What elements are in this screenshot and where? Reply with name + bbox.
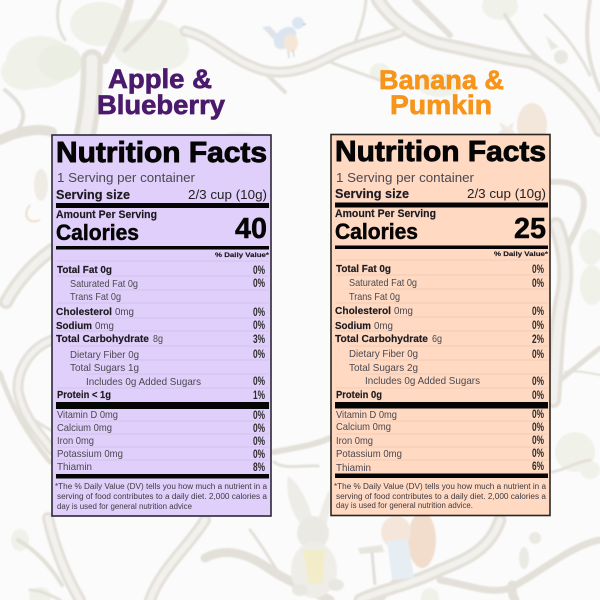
panel: Banana & Pumkin nutrition facts: % Daily Value* [494,251,548,258]
calories: 25 [514,213,546,245]
nutrient rows: 6g [432,333,442,345]
nutrient rows: Saturated Fat 0g [70,278,138,290]
vitamins and minerals: Thiamin [336,462,371,474]
vitamins and minerals: 0% [253,449,265,461]
nutrient rows: Trans Fat 0g [70,291,121,303]
panel: Apple & Blueberry nutrition facts: % Daily Value* [215,252,269,259]
vitamins and minerals: 0% [532,422,544,434]
servings per container: 1 Serving per container [336,171,474,185]
left side branches [6,250,52,302]
title: Banana & Pumkin: Pumkin [390,90,492,120]
nutrient rows: Dietary Fiber 0g [349,348,418,360]
center side branches [274,438,330,452]
nutrient rows: 8g [153,333,163,345]
vitamins and minerals: Thiamin [57,461,92,473]
vitamins and minerals: Potassium 0mg [57,448,123,460]
right side branches [552,182,584,262]
nutrient rows [335,263,544,402]
nutrient rows: 0% [253,265,265,277]
vitamins and minerals: 0% [532,435,544,447]
footnote: serving of food contributes to a daily diet. 2,000 calories a [57,492,268,501]
vitamins and minerals: Vitamin D 0mg [57,409,118,421]
vitamins and minerals: Potassium 0mg [336,448,402,460]
nutrient rows: Protein < 1g [57,389,111,401]
nutrient rows: Trans Fat 0g [349,291,400,303]
nutrient rows: Sodium [56,320,92,332]
nutrient rows: 0% [253,320,265,332]
footnote [55,482,268,511]
nutrient rows: 0% [253,376,265,388]
calories: Calories [56,220,139,245]
vitamins and minerals: 0% [253,423,265,435]
nutrient rows: Total Fat 0g [336,263,391,275]
calories: Amount Per Serving [56,209,157,221]
vitamins and minerals: Calcium 0mg [336,421,391,433]
nutrient rows: Dietary Fiber 0g [70,349,139,361]
nutrient rows: 3% [253,334,265,346]
squirrel in overalls [358,512,436,585]
calories [335,208,546,245]
nutrient rows: Sodium [335,320,371,332]
serving size: 2/3 cup (10g) [467,187,546,201]
serving size: Serving size [335,187,409,201]
nutrient rows: 2% [532,334,544,346]
title: Banana & Pumkin [379,65,504,120]
heading: Nutrition Facts: Nutrition Facts [335,136,546,168]
vitamins and minerals: 8% [253,462,265,474]
vitamins and minerals: 0% [532,448,544,460]
title: Banana & Pumkin: Banana & [379,65,504,95]
calories: 40 [235,213,267,245]
rabbit [287,476,344,598]
nutrient rows: Total Sugars 1g [70,362,139,374]
nutrient rows: Cholesterol [56,306,112,318]
calories: Amount Per Serving [335,208,436,220]
nutrient rows [56,264,265,402]
serving size: Serving size [56,188,130,202]
calories: Calories [335,219,418,244]
nutrient rows: Cholesterol [335,305,391,317]
nutrient rows: Total Carbohydrate [56,333,149,345]
nutrient rows: 0% [532,320,544,332]
small squirrel at upper right [546,36,568,64]
footnote: *The % Daily Value (DV) tells you how much a nutrient in a [334,482,547,491]
vitamins and minerals [336,409,544,474]
small animal on left branch [26,169,48,221]
nutrient rows: 0% [532,349,544,361]
nutrient rows: Total Fat 0g [57,264,112,276]
panel: Apple & Blueberry nutrition facts [52,135,271,516]
nutrient rows: 0mg [115,306,134,318]
footnote: day is used for general nutrition advice. [336,501,473,510]
vitamins and minerals: Vitamin D 0mg [336,409,397,421]
nutrient rows: 0% [532,376,544,388]
nutrient rows: 0mg [394,305,413,317]
vitamins and minerals: 0% [532,409,544,421]
nutrient rows: 0% [253,278,265,290]
nutrient rows: Protein 0g [336,389,382,401]
nutrient rows: 1% [253,390,265,402]
serving size [335,187,546,201]
serving size [56,188,267,202]
nutrient rows: 0% [532,390,544,402]
bottom branches [48,518,80,600]
footnote [334,482,547,510]
vitamins and minerals: 6% [532,461,544,473]
title: Apple & Blueberry [97,64,225,120]
vitamins and minerals [57,409,265,474]
vitamins and minerals: 0% [253,436,265,448]
panel: Banana & Pumkin nutrition facts [331,134,550,516]
nutrient rows: Saturated Fat 0g [349,277,417,289]
footnote: *The % Daily Value (DV) tells you how much a nutrient in a [55,482,268,491]
vitamins and minerals: Calcium 0mg [57,422,112,434]
nutrient rows: 0mg [95,320,114,332]
nutrient rows: Includes 0g Added Sugars [365,375,480,387]
title: Apple & Blueberry: Blueberry [97,90,225,120]
vitamins and minerals: Iron 0mg [336,435,373,447]
vitamins and minerals: 0% [253,410,265,422]
servings per container: 1 Serving per container [57,171,195,185]
footnote: serving of food contributes to a daily diet. 2,000 calories a [336,492,547,501]
serving size: 2/3 cup (10g) [188,188,267,202]
calories [56,209,267,245]
nutrient rows: Includes 0g Added Sugars [86,376,201,388]
nutrient rows: 0% [532,278,544,290]
bird [262,17,307,58]
nutrient rows: Total Carbohydrate [335,333,428,345]
heading: Nutrition Facts: Nutrition Facts [56,137,267,169]
nutrient rows: 0mg [374,320,393,332]
nutrient rows: 0% [253,349,265,361]
nutrient rows: 0% [532,264,544,276]
nutrient rows: Total Sugars 2g [349,362,418,374]
footnote: day is used for general nutrition advice [57,502,192,511]
left tree trunk [85,60,92,134]
small squirrel bottom right [519,532,541,569]
nutrient rows: 0% [253,307,265,319]
title: Apple & Blueberry: Apple & [108,64,212,94]
top branches [185,31,400,72]
squirrel at top right [497,103,547,152]
nutrient rows: 0% [532,306,544,318]
vitamins and minerals: Iron 0mg [57,435,94,447]
